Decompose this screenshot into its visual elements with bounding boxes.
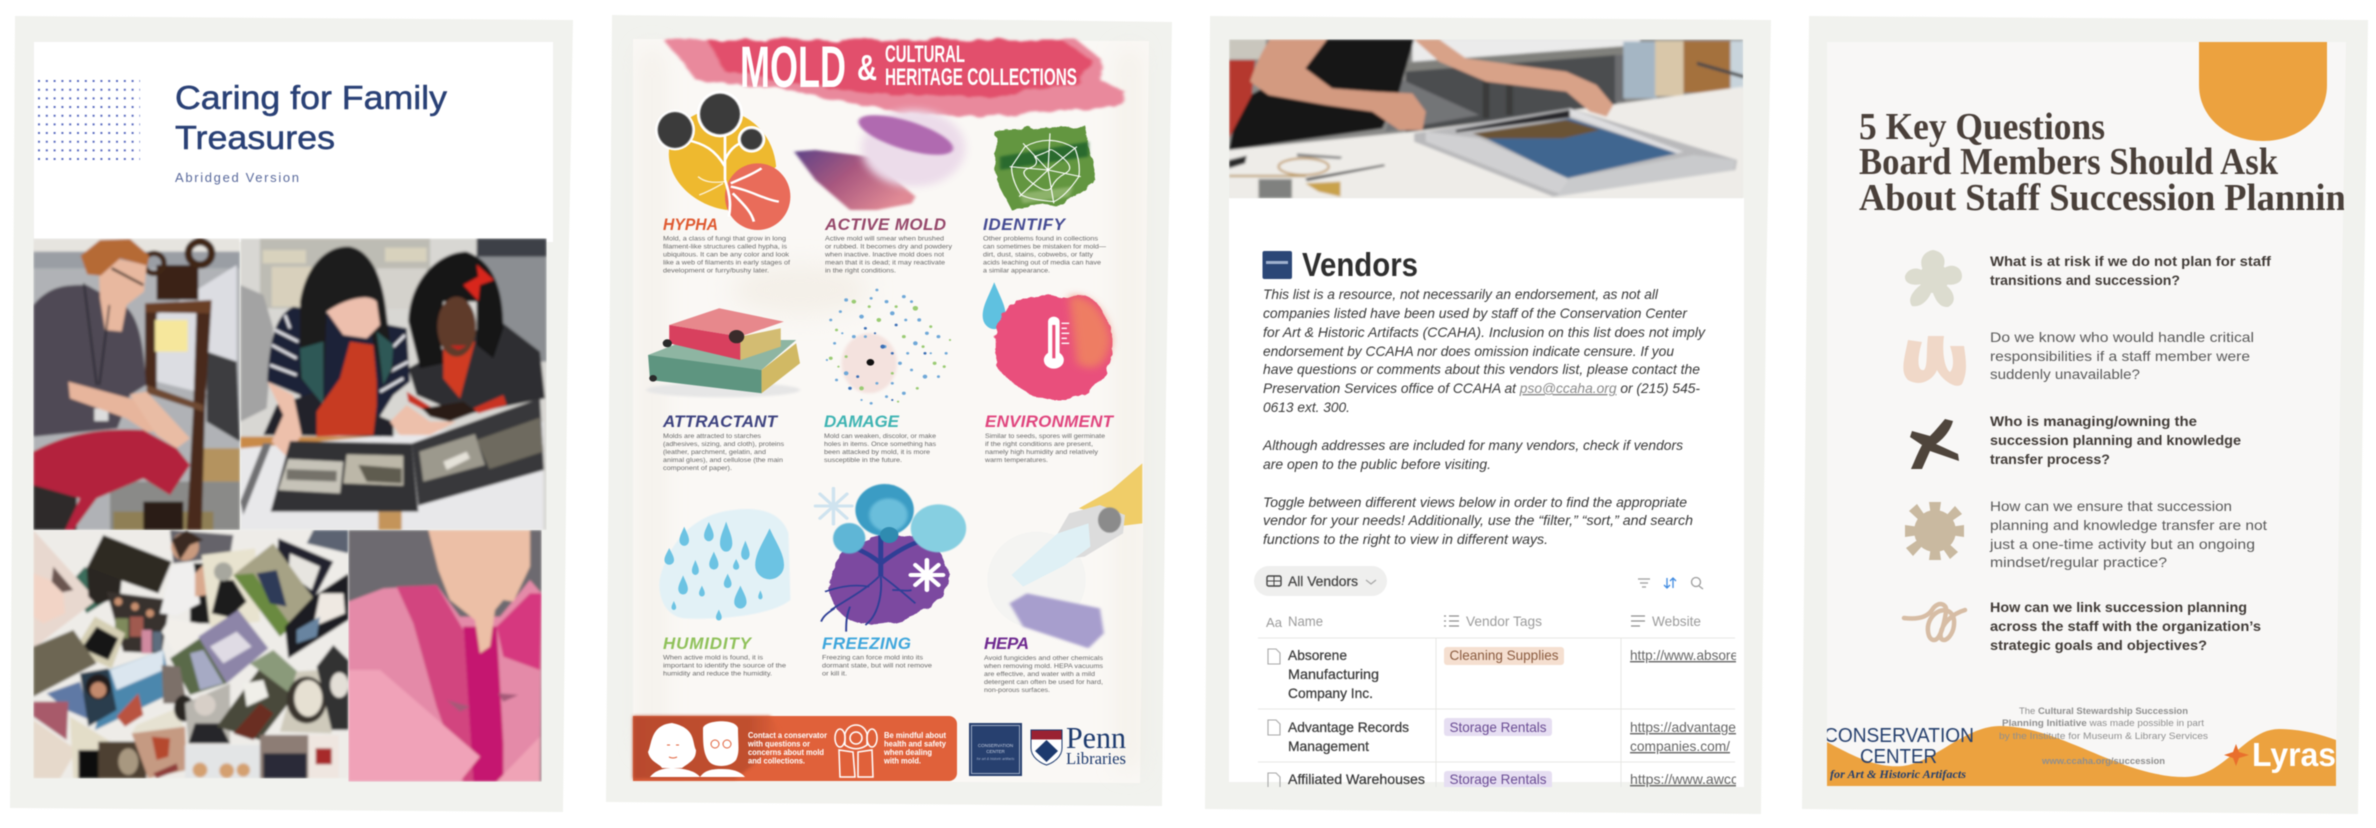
section: humidity: humidity and reduce the humidity. bbox=[663, 670, 772, 678]
table header: Aa bbox=[1266, 615, 1283, 630]
section: hypha: development or furry/bushy later. bbox=[663, 268, 769, 274]
intro text: functions to the right to view in different ways. bbox=[1263, 531, 1548, 547]
row: Absorene: Cleaning Supplies bbox=[1450, 647, 1558, 663]
title bbox=[1858, 112, 2345, 212]
question 2 bbox=[1990, 329, 2254, 382]
logo: Conservation Center: CENTER bbox=[1860, 746, 1937, 768]
section: HEPA bbox=[983, 634, 1104, 694]
question 5: strategic goals and objectives? bbox=[1990, 637, 2207, 653]
intro text: Preservation Services office of CCAHA at pso@ccaha.org or (215) 545- bbox=[1263, 380, 1700, 396]
icon: hypha bbox=[655, 91, 790, 230]
icon: sunburst bbox=[1905, 502, 1964, 560]
icon: flower bbox=[1905, 250, 1962, 307]
logo: Penn Libraries: Penn bbox=[1066, 720, 1126, 755]
section: active mold: in the right conditions. bbox=[825, 268, 896, 274]
icon: damage dots bbox=[826, 289, 951, 405]
subtitle: Abridged Version bbox=[175, 170, 299, 185]
section: HEPA: are effective, and water with a mild bbox=[984, 671, 1095, 678]
row: Advantage Records Management: Management bbox=[1288, 738, 1369, 754]
dot grid decoration bbox=[38, 81, 140, 159]
section: attractant: ATTRACTANT bbox=[662, 412, 779, 431]
table header: Website bbox=[1652, 613, 1701, 629]
section: humidity: HUMIDITY bbox=[663, 634, 753, 653]
logo: Penn Libraries: Libraries bbox=[1066, 749, 1126, 768]
photo: conservator framing artwork bbox=[1229, 39, 1744, 198]
icon: active mold brush stroke bbox=[794, 107, 965, 210]
section: identify: dirt, dust, stains, cobwebs, or fatty bbox=[983, 252, 1094, 258]
intro text: have questions or comments about this vendors list, please contact the bbox=[1263, 361, 1700, 377]
row: Advantage Records Management: companies.com/ bbox=[1630, 738, 1730, 754]
logo: Lyras: Lyras bbox=[2252, 736, 2336, 773]
section: hypha: filament-like structures called hypha, is bbox=[663, 244, 788, 250]
section: HEPA: HEPA bbox=[984, 634, 1029, 653]
section: damage: susceptible in the future. bbox=[824, 457, 902, 464]
section: HEPA: when removing mold. HEPA vacuums bbox=[983, 663, 1104, 670]
callout: contact band: health and safety bbox=[884, 740, 947, 748]
section: environment bbox=[984, 412, 1115, 464]
icon: CCAHA logo tile bbox=[1262, 251, 1292, 279]
funding credit: by the Institute for Museum & Library Services bbox=[1999, 731, 2208, 742]
funding credit: Planning Initiative was made possible in part bbox=[2002, 718, 2204, 729]
intro text: vendor for your needs! Additionally, use the “filter,” “sort,” and search bbox=[1263, 512, 1693, 528]
logo: Penn Libraries bbox=[1031, 720, 1126, 768]
icon: environment thermometer bbox=[983, 282, 1112, 401]
section: environment: if the right conditions are present, bbox=[985, 441, 1093, 448]
question 4: How can we ensure that succession bbox=[1990, 498, 2232, 514]
section: attractant: animal glues), and cellulose (the main bbox=[663, 457, 783, 464]
question 1 bbox=[1990, 253, 2271, 288]
photo: pink silk jacket with hands bbox=[348, 530, 542, 782]
orange arch bbox=[2199, 42, 2327, 141]
intro text: This list is a resource, not necessarily an endorsement, as not all bbox=[1263, 286, 1659, 302]
question 2: Do we know who would handle critical bbox=[1990, 329, 2254, 345]
table header bbox=[1266, 614, 1701, 630]
section: identify bbox=[983, 215, 1106, 274]
callout: contact band: when dealing bbox=[883, 748, 932, 757]
row: Affiliated Warehouses: https://www.awcc bbox=[1630, 771, 1738, 787]
poster title: MOLD bbox=[740, 35, 846, 100]
callout: contact band: with questions or bbox=[747, 740, 810, 748]
section: freezing bbox=[822, 634, 932, 678]
intro text: Although addresses are included for many vendors, check if vendors bbox=[1262, 437, 1683, 453]
question 3: Who is managing/owning the bbox=[1990, 413, 2197, 429]
banner watercolor bbox=[663, 40, 1127, 117]
logo: Conservation Center bbox=[1824, 725, 1974, 781]
row: Advantage Records Management: Advantage Records bbox=[1288, 719, 1409, 735]
intro text: 0613 ext. 300. bbox=[1263, 399, 1350, 415]
question 4: planning and knowledge transfer are not bbox=[1990, 517, 2267, 533]
callout: contact band: Contact a conservator bbox=[748, 731, 827, 740]
funding credit: www.ccaha.org/succession bbox=[2041, 756, 2165, 767]
vendor table bbox=[1258, 613, 1738, 789]
poster title: CULTURAL bbox=[885, 41, 965, 68]
section: attractant: (leather, parchment, gelatin, and bbox=[663, 449, 766, 456]
question 4: mindset/regular practice? bbox=[1990, 554, 2167, 570]
question 3 bbox=[1990, 413, 2241, 467]
section: humidity bbox=[663, 634, 786, 678]
table header: Name bbox=[1288, 613, 1323, 629]
row: Absorene: Manufacturing bbox=[1288, 666, 1379, 682]
section: identify: a similar appearance. bbox=[983, 268, 1050, 274]
icon: identify cobweb bbox=[994, 125, 1096, 210]
row: Advantage Records Management: https://advantage bbox=[1630, 719, 1736, 735]
icon: respirator and gloves bbox=[835, 725, 877, 777]
callout: contact band: concerns about mold bbox=[748, 748, 824, 757]
title: 5 Key Questions bbox=[1859, 106, 2105, 148]
heading: Vendors: Vendors bbox=[1302, 246, 1418, 283]
row: Absorene: http://www.absore bbox=[1630, 647, 1738, 663]
section: active mold: when inactive. Inactive mold does not bbox=[824, 252, 944, 258]
section: identify: can sometimes be mistaken for mold— bbox=[983, 244, 1106, 250]
section: identify: acids leaching out of media can have bbox=[983, 260, 1101, 266]
photo: upholstery conservator at chair bbox=[33, 238, 240, 530]
section: damage: DAMAGE bbox=[824, 412, 900, 431]
section: identify: Other problems found in collections bbox=[983, 236, 1099, 242]
question 1: What is at risk if we do not plan for staff bbox=[1990, 253, 2271, 269]
question 5 bbox=[1990, 599, 2261, 653]
question 5: How can we link succession planning bbox=[1990, 599, 2247, 615]
icon: hand-drawn X bbox=[1910, 419, 1959, 469]
icon: squiggle W bbox=[1903, 336, 1966, 386]
row: Affiliated Warehouses: Affiliated Warehouses bbox=[1288, 771, 1425, 787]
poster title: HERITAGE COLLECTIONS bbox=[885, 64, 1077, 91]
row: Absorene: Absorene bbox=[1288, 647, 1347, 663]
footer wave bbox=[1827, 726, 2336, 786]
section: freezing: or kill it. bbox=[822, 670, 847, 678]
row: Advantage Records Management: Storage Rentals bbox=[1450, 719, 1546, 735]
section: hypha: ubiquitous. It can be any color and look bbox=[663, 252, 790, 258]
poster title: & bbox=[857, 47, 877, 88]
section: environment: warm temperatures. bbox=[984, 457, 1048, 464]
logo: Conservation Center: CONSERVATION bbox=[978, 743, 1013, 748]
question 5: across the staff with the organization’s bbox=[1990, 618, 2261, 634]
section: hypha: HYPHA bbox=[663, 215, 718, 234]
section: attractant bbox=[662, 412, 785, 472]
intro text: are open to the public before visiting. bbox=[1263, 456, 1491, 472]
question 4 bbox=[1989, 498, 2267, 570]
intro text: endorsement by CCAHA nor does omission indicate censure. If you bbox=[1263, 343, 1674, 359]
section: environment: ENVIRONMENT bbox=[985, 412, 1115, 431]
table header: Vendor Tags bbox=[1466, 613, 1542, 629]
section: attractant: Molds are attracted to starches bbox=[663, 433, 762, 440]
section: attractant: component of paper). bbox=[663, 465, 732, 472]
row: Affiliated Warehouses bbox=[1268, 771, 1738, 789]
section: HEPA: Avoid fungicides and other chemicals bbox=[984, 655, 1104, 662]
funding credit bbox=[1999, 706, 2208, 767]
poster title bbox=[740, 35, 1077, 100]
section: damage: Mold can weaken, discolor, or make bbox=[824, 433, 936, 440]
section: active mold: mean that it is dead; it may reactivate bbox=[825, 260, 945, 266]
title: Board Members Should Ask bbox=[1859, 141, 2279, 183]
section: active mold: Active mold will smear when brushed bbox=[825, 236, 944, 242]
logo: Conservation Center: for Art & Historic Artifacts bbox=[1830, 767, 1966, 781]
photo: two conservators with photo album bbox=[240, 238, 547, 530]
question 4: just a one-time activity but an ongoing bbox=[1989, 536, 2255, 552]
section: active mold bbox=[824, 215, 953, 274]
panel: 5 Key Questions bbox=[1802, 16, 2368, 814]
section: active mold: ACTIVE MOLD bbox=[824, 215, 946, 234]
callout: contact band: Be mindful about bbox=[884, 731, 946, 740]
callout: contact band: and collections. bbox=[748, 756, 805, 766]
row: Absorene: Company Inc. bbox=[1288, 685, 1373, 701]
question 1: transitions and succession? bbox=[1990, 272, 2180, 288]
section: attractant: (adhesives, sizing, and cloth), proteins bbox=[663, 441, 785, 448]
section: environment: Similar to seeds, spores will germinate bbox=[985, 433, 1105, 440]
icon: conservators bbox=[648, 721, 745, 777]
callout: contact band bbox=[633, 716, 957, 781]
title: Caring for Family bbox=[175, 79, 448, 116]
section: active mold: or rubbed. It becomes dry and powdery bbox=[825, 244, 953, 250]
icon: attractant books bbox=[646, 308, 800, 397]
logo: Conservation Center: CENTER bbox=[986, 749, 1005, 754]
photo: collage of family snapshots bbox=[33, 530, 348, 778]
question 3: transfer process? bbox=[1990, 451, 2110, 467]
section: damage: been attacked by mold, it is more bbox=[824, 449, 930, 456]
intro text: for Art & Historic Artifacts (CCAHA). Inclusion on this list does not imply bbox=[1263, 324, 1706, 340]
section: freezing: dormant state, but will not remove bbox=[822, 662, 932, 670]
section: HEPA: detergent can often be used for hard, bbox=[984, 679, 1103, 686]
view selector pill bbox=[1254, 566, 1387, 596]
panel: Vendors page bbox=[1205, 16, 1771, 814]
panel: Caring for Family Treasures bbox=[10, 16, 573, 812]
section: freezing: Freezing can force mold into its bbox=[822, 654, 924, 662]
icon: loop scribble bbox=[1904, 604, 1965, 640]
funding credit: The Cultural Stewardship Succession bbox=[2019, 706, 2188, 717]
logo: Conservation Center: CONSERVATION bbox=[1824, 725, 1974, 747]
callout: contact band: with mold. bbox=[883, 756, 921, 766]
question 2: responsibilities if a staff member were bbox=[1990, 348, 2250, 364]
question 2: suddenly unavailable? bbox=[1990, 366, 2140, 382]
section: identify: IDENTIFY bbox=[983, 215, 1067, 234]
icon: humidity raindrops bbox=[659, 509, 790, 620]
section: hypha: Mold, a class of fungi that grow in long bbox=[663, 236, 786, 242]
view selector pill: All Vendors bbox=[1288, 573, 1358, 589]
logo: Conservation Center: for art & historic artifacts bbox=[977, 757, 1015, 761]
icon: HEPA vacuum bbox=[987, 463, 1142, 648]
question 3: succession planning and knowledge bbox=[1990, 432, 2241, 448]
section: hypha: like a web of filaments in early stages of bbox=[663, 260, 790, 266]
section: damage bbox=[824, 412, 937, 464]
section: freezing: FREEZING bbox=[822, 634, 911, 653]
section: environment: namely high humidity and relatively bbox=[985, 449, 1099, 456]
intro text: Toggle between different views below in order to find the appropriate bbox=[1263, 494, 1687, 510]
title bbox=[175, 79, 448, 156]
row: Affiliated Warehouses: Storage Rentals bbox=[1450, 771, 1546, 787]
section: HEPA: non-porous surfaces. bbox=[984, 687, 1050, 694]
icon: freezing mold bbox=[815, 484, 966, 632]
section: damage: holes in items. Once something has bbox=[824, 441, 937, 448]
section: humidity: When active mold is found, it is bbox=[663, 654, 764, 662]
logo: Conservation Center bbox=[969, 723, 1022, 776]
row: Absorene bbox=[1268, 647, 1738, 701]
intro text bbox=[1262, 286, 1706, 547]
intro text: companies listed have been used by staff of the Conservation Center bbox=[1263, 305, 1688, 321]
panel: Mold & Cultural Heritage Collections poster bbox=[606, 15, 1172, 806]
title: About Staff Succession Planning bbox=[1859, 177, 2364, 219]
toolbar icons bbox=[1638, 578, 1703, 589]
row: Advantage Records Management bbox=[1268, 718, 1736, 754]
section: humidity: important to identify the source of the bbox=[663, 662, 786, 670]
title: Treasures bbox=[175, 119, 335, 156]
section: hypha bbox=[663, 215, 790, 274]
